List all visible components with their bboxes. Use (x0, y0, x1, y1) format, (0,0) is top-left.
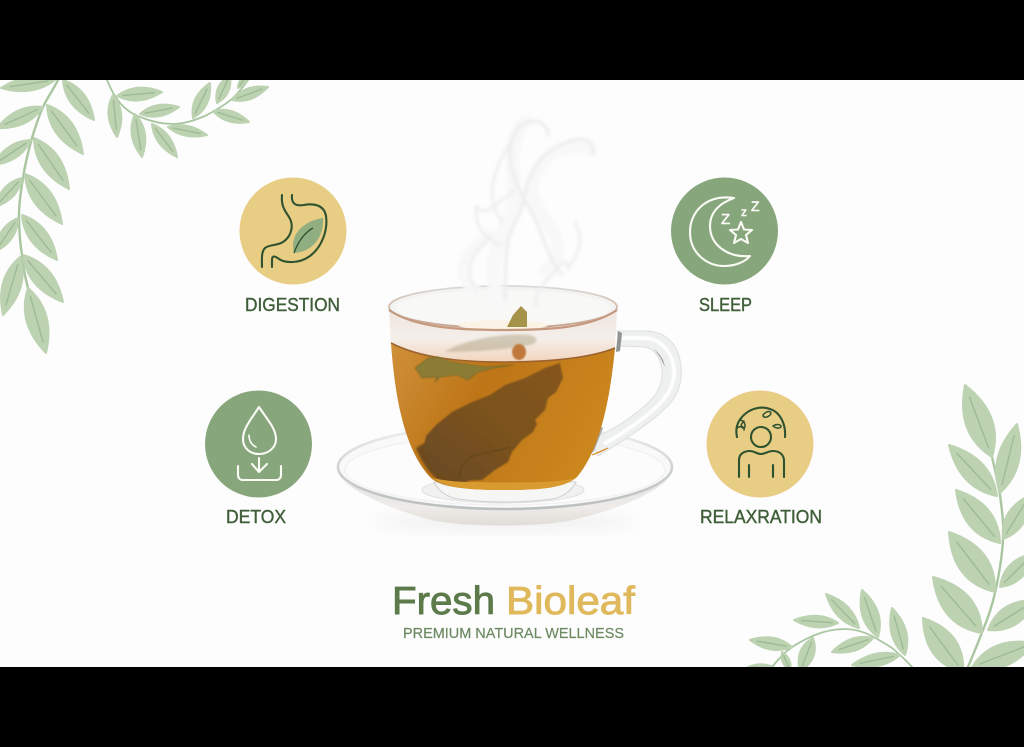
glass base (434, 482, 576, 502)
leaf branch: top left large (0, 76, 94, 353)
brand logo: Bioleaf (506, 580, 635, 623)
saucer shadow (375, 513, 635, 531)
glass rim front (389, 310, 617, 330)
label: SLEEP (699, 295, 752, 315)
floating leaf (415, 357, 513, 382)
label: DETOX (226, 507, 286, 527)
icon: moon and star: z (741, 205, 747, 219)
tea bottom glow (432, 477, 577, 490)
tea shadow at bottom left (416, 440, 470, 484)
big steeped leaf (423, 363, 563, 481)
label: DIGESTION (245, 295, 340, 315)
frosted leaf through the glass (445, 335, 536, 352)
steam (463, 121, 593, 305)
cup handle (589, 331, 681, 456)
brand logo: Fresh (392, 580, 495, 623)
label: RELAXRATION (700, 507, 822, 527)
tea cup on saucer (338, 286, 681, 531)
icon: water drop with tray (238, 407, 281, 480)
leaf stem blob (512, 344, 526, 360)
glass cup interior (389, 286, 617, 362)
icon: moon and star: Z (721, 211, 730, 228)
benefit: digestion (240, 178, 346, 315)
tea surface line (391, 343, 615, 362)
brand logo (392, 580, 635, 642)
leaf branch: bottom right large (923, 385, 1024, 672)
tea liquid (391, 343, 615, 490)
leaf above the surface (507, 306, 527, 327)
benefit: detox (205, 390, 312, 527)
benefit: relaxation (700, 390, 822, 527)
saucer (338, 425, 672, 526)
icon: stomach with leaf (262, 195, 326, 267)
icon: person with vine halo (736, 408, 785, 477)
icon: moon and star: Z (751, 198, 760, 214)
icon: moon and star (690, 197, 760, 266)
leaf branch: top small (107, 74, 268, 157)
leaf branch: bottom small (748, 590, 912, 672)
benefit: sleep (671, 178, 778, 315)
tagline: PREMIUM NATURAL WELLNESS (403, 626, 624, 642)
